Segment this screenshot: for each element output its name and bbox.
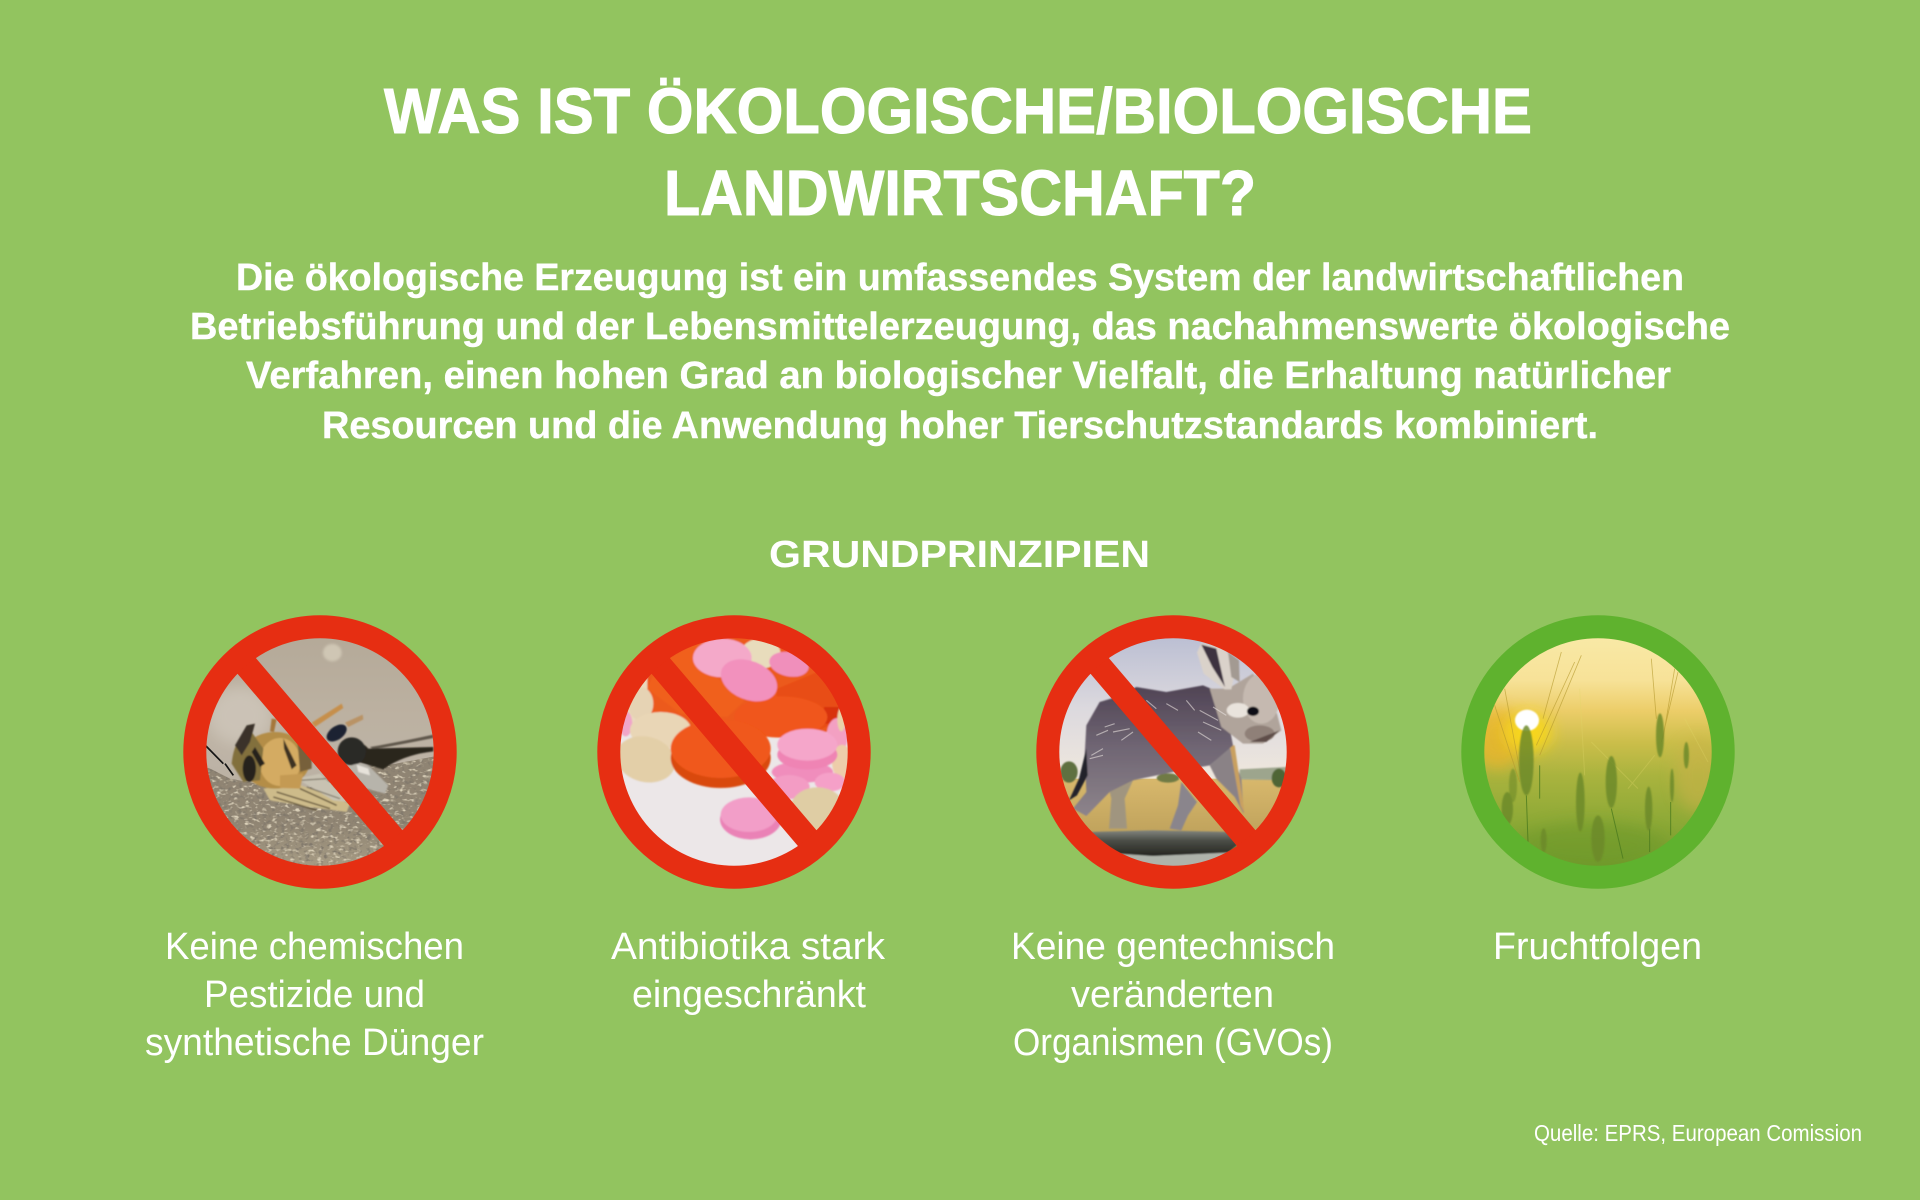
label	[611, 926, 886, 1016]
icon: dead bee prohibited	[195, 627, 445, 877]
label: Fruchtfolgen	[1493, 926, 1702, 968]
intro paragraph: Betriebsführung und der Lebensmittelerzeugung, das nachahmenswerte ökologische	[190, 306, 1730, 348]
label: Antibiotika stark	[611, 926, 886, 968]
label	[1011, 926, 1335, 1064]
intro paragraph: Die ökologische Erzeugung ist ein umfassendes System der landwirtschaftlichen	[236, 257, 1684, 299]
label: Keine chemischen	[165, 926, 464, 968]
label: Organismen (GVOs)	[1013, 1022, 1333, 1064]
title: LANDWIRTSCHAFT?	[664, 157, 1256, 229]
title: WAS IST ÖKOLOGISCHE/BIOLOGISCHE	[384, 75, 1532, 147]
icon: rabbit-elephant prohibited	[1048, 627, 1298, 877]
label	[145, 926, 484, 1064]
intro paragraph: Verfahren, einen hohen Grad an biologischer Vielfalt, die Erhaltung natürlicher	[246, 355, 1671, 397]
panel: no chemical pesticides	[145, 627, 484, 1064]
label: Pestizide und	[204, 974, 425, 1016]
label: eingeschränkt	[632, 974, 866, 1016]
intro paragraph	[190, 257, 1730, 447]
label: synthetische Dünger	[145, 1022, 484, 1064]
section heading: Grundprinzipien: GRUNDPRINZIPIEN	[769, 534, 1150, 576]
source note: Quelle: EPRS, European Comission	[1534, 1120, 1862, 1146]
icon: pills prohibited	[609, 627, 859, 877]
title	[384, 75, 1532, 229]
label: veränderten	[1071, 974, 1274, 1016]
panel: crop rotation	[1471, 627, 1723, 968]
label: Keine gentechnisch	[1011, 926, 1335, 968]
intro paragraph: Resourcen und die Anwendung hoher Tierschutzstandards kombiniert.	[322, 405, 1598, 447]
panel: no GMOs	[1011, 627, 1335, 1064]
panel: antibiotics restricted	[609, 627, 886, 1016]
icon: wheat field at sunrise	[1471, 627, 1723, 877]
